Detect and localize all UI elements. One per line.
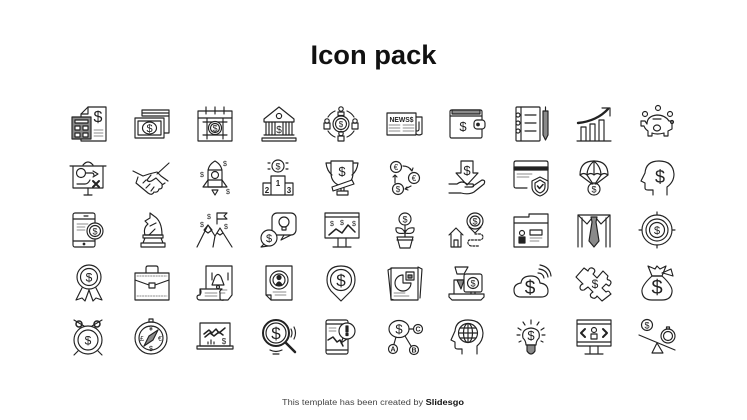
icon: hand receiving money: $ [463,163,471,178]
icon: location pin dollar [327,266,355,301]
icon: employee folder [514,214,548,247]
icon: certificate scroll with bell [197,266,232,300]
icon: monitor with financial chart: $ [330,221,334,228]
icon: mountains with flag: $ [207,214,211,221]
icon: compass: € [158,336,162,343]
icon: people around coin [324,107,358,141]
icon: hand receiving money [449,161,485,194]
icon: calculator and invoice: $ [94,109,103,126]
icon: wallet: $ [459,119,467,134]
icon: puzzle piece [576,268,611,301]
icon: phone with coin bubble [73,213,103,247]
icon: magnifier dollar: $ [271,324,281,343]
icon: puzzle piece: $ [592,277,599,291]
icon: magnifier dollar [263,320,296,354]
icon: award rosette: $ [86,270,93,284]
icon: trophy with ribbon [326,161,358,195]
icon: podium with coin [263,160,293,195]
icon: podium with coin: $ [275,162,281,172]
icon: currency exchange cycle [390,162,420,194]
icon: podium with coin: 2 [265,186,270,195]
icon: money bag [642,266,673,300]
icon: monitor with financial chart: $ [340,220,344,227]
title: Icon pack [310,40,437,70]
icon: phone alert chart [326,320,355,354]
icon: house route pin: $ [472,216,478,226]
icon: parachute with coin: $ [591,184,597,194]
icon: compass: $ [149,346,153,353]
icon: rocket with dollars [200,161,230,196]
icon: seesaw coin versus clock: $ [644,320,650,330]
icon: target coin: $ [654,225,660,237]
icon: briefcase [135,266,169,300]
icon: laptop businessman coin: $ [470,278,476,288]
icon: piggy bank [641,106,674,136]
icon: currency network: A [390,346,396,354]
icon: handshake [133,163,169,194]
icon: currency network: B [411,348,417,354]
icon: parachute with coin [580,161,608,195]
icon: chat bubbles with lightbulb and coin [261,213,296,247]
icon: notebook and pen [516,107,548,141]
icon: document with badge [266,266,292,300]
icon: money plant pot [396,213,414,248]
icon: podium with coin: 3 [287,186,292,195]
icon: people around coin: $ [339,120,344,129]
icon: currency exchange cycle: € [412,174,417,183]
icon: bank building [262,107,296,141]
icon: location pin dollar: $ [336,271,346,290]
icon: head with dollar [641,161,674,195]
icon: alarm clock dollar: $ [85,334,92,348]
icon: lightbulb dollar: $ [527,328,535,343]
icon: newspaper [387,113,422,135]
icon: cloud dollar wifi [514,265,551,299]
icon: compass [135,319,167,354]
icon: target coin [639,212,675,248]
icon: chat bubbles with lightbulb and coin: $ [266,233,272,245]
icon: currency network [388,320,422,354]
footer credit: This template has been created by Slidesgo [282,398,464,407]
icon: mountains with flag [197,213,232,247]
icon: monitor with financial chart: $ [352,221,356,228]
icon: mountains with flag: $ [200,222,204,229]
icon: growth chart [577,108,611,141]
icon: calendar: $ [212,124,218,134]
icon: report with pie chart [388,267,422,300]
icon: chess knight [141,213,165,247]
icon: compass: ¥ [149,326,153,333]
icon: laptop stock chart [197,323,233,349]
icon: presentation strategy board [70,162,106,195]
icon: monitor with code user [577,320,611,354]
icon: rocket with dollars: $ [226,189,230,196]
icon: compass: £ [140,336,144,343]
icon: cloud dollar wifi: $ [525,278,536,299]
icon: bank building: $ [276,125,282,136]
icon: calculator and invoice [72,107,106,141]
icon: laptop businessman coin [449,267,484,300]
icon: mountains with flag: $ [224,224,228,231]
icon: award rosette [76,265,102,301]
icon: currency network: $ [395,322,403,336]
icon: head with globe [451,320,483,354]
icon: money plant pot: $ [402,214,408,224]
icon: currency exchange cycle: € [394,163,399,172]
icon: currency network: C [415,326,421,334]
icon: podium with coin: 1 [276,179,281,188]
icon: credit card shield [514,161,548,196]
icon: monitor with financial chart [325,213,359,247]
icon: newspaper: NEWS$ [390,115,414,124]
icon: seesaw coin versus clock [639,320,675,353]
icon: phone with coin bubble: $ [92,226,98,236]
icon: calendar [198,107,232,141]
icon: rocket with dollars: $ [200,172,204,179]
icon: house route pin [449,213,483,247]
icon: banknotes [135,110,169,138]
icon: wallet [450,110,485,138]
icon: laptop stock chart: $ [222,337,227,346]
icon: alarm clock dollar [74,320,102,355]
icon: suit and tie [578,215,610,247]
icon: rocket with dollars: $ [223,161,227,168]
icon: currency exchange cycle: $ [396,185,401,194]
icon: money bag: $ [651,277,663,299]
icon: lightbulb dollar [517,320,545,354]
icon: head with dollar: $ [655,167,665,187]
icon: trophy with ribbon: $ [338,164,346,179]
icon: banknotes: $ [146,123,153,135]
